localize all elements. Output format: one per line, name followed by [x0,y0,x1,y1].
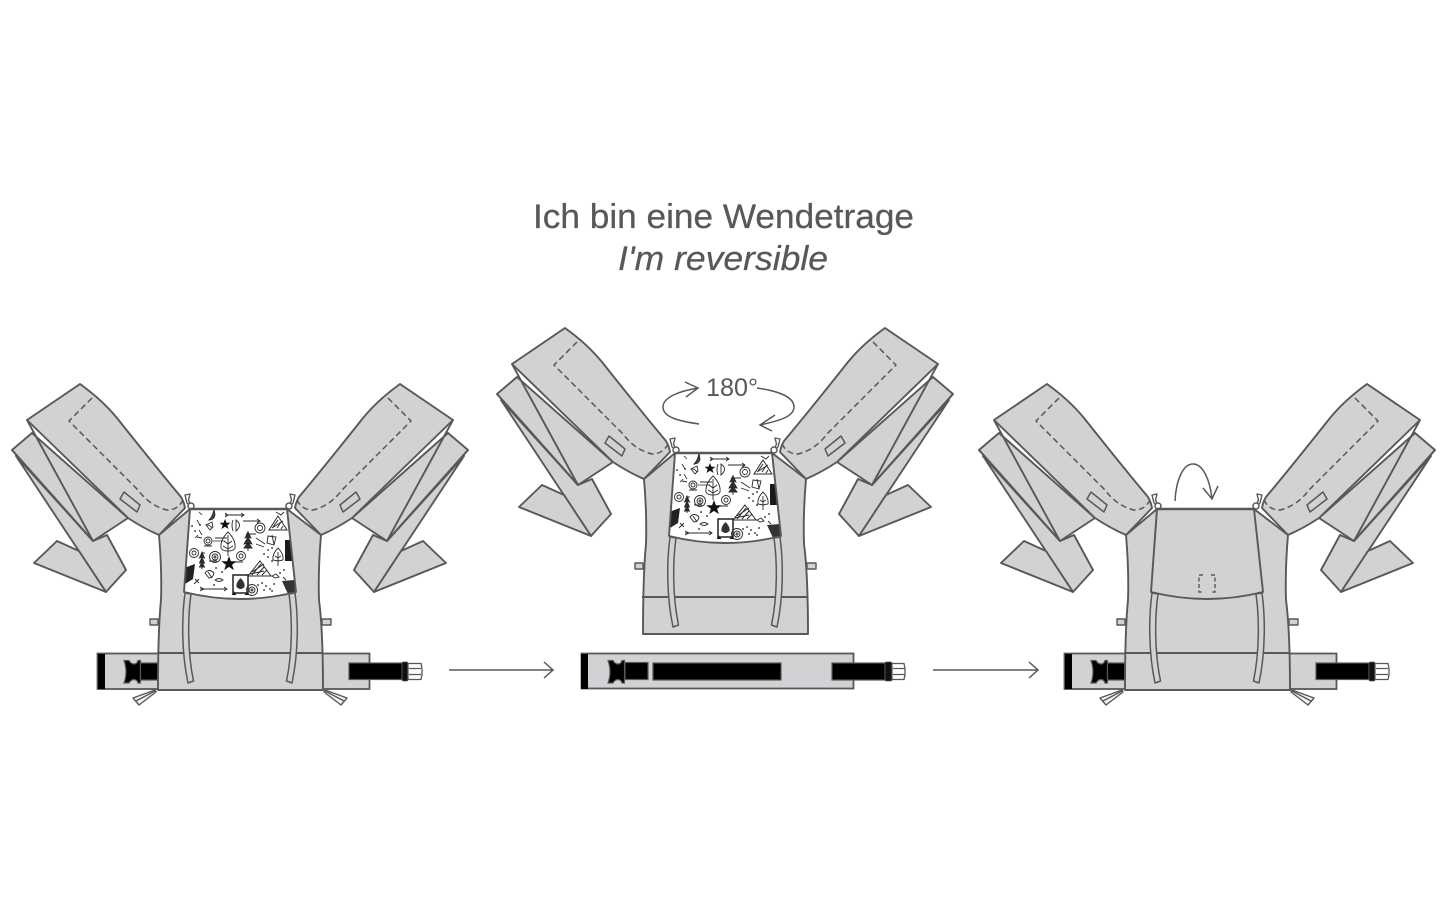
heading: English: I'm reversible [618,240,828,278]
infographic: reversible baby carrier [11,202,1436,706]
long waist belt [581,654,905,689]
title [533,198,914,278]
carrier 3: plain side facing out [979,384,1435,705]
carrier body [1117,509,1298,690]
label: 180 degrees: 180° [706,374,758,402]
carrier body [150,509,331,690]
waist belt [98,654,422,689]
patterned hood panel [184,509,298,599]
left shoulder strap [979,384,1161,592]
right shoulder strap [1253,384,1435,592]
carrier 1: print side facing out [12,384,468,705]
hood cords [1150,593,1264,683]
hood cords [183,593,297,683]
arrow: rotate left [663,382,699,424]
left shoulder strap [12,384,194,592]
arrow: flip hood over [1175,464,1218,501]
right shoulder strap [286,384,468,592]
arrow: rotate right [757,388,794,431]
tassels [133,690,347,705]
carrier 2: rotated 180 degrees [497,328,953,689]
tassels [1100,690,1314,705]
arrow: step 2 to step 3 [933,662,1038,678]
plain hood flap [1151,509,1263,599]
rotation label and arrows [663,374,794,431]
carrier upper part [497,328,953,634]
waist belt [1064,654,1389,689]
label placement marker [1199,575,1215,592]
heading: German: Ich bin eine Wendetrage [533,198,914,236]
arrow: step 1 to step 2 [449,662,553,678]
